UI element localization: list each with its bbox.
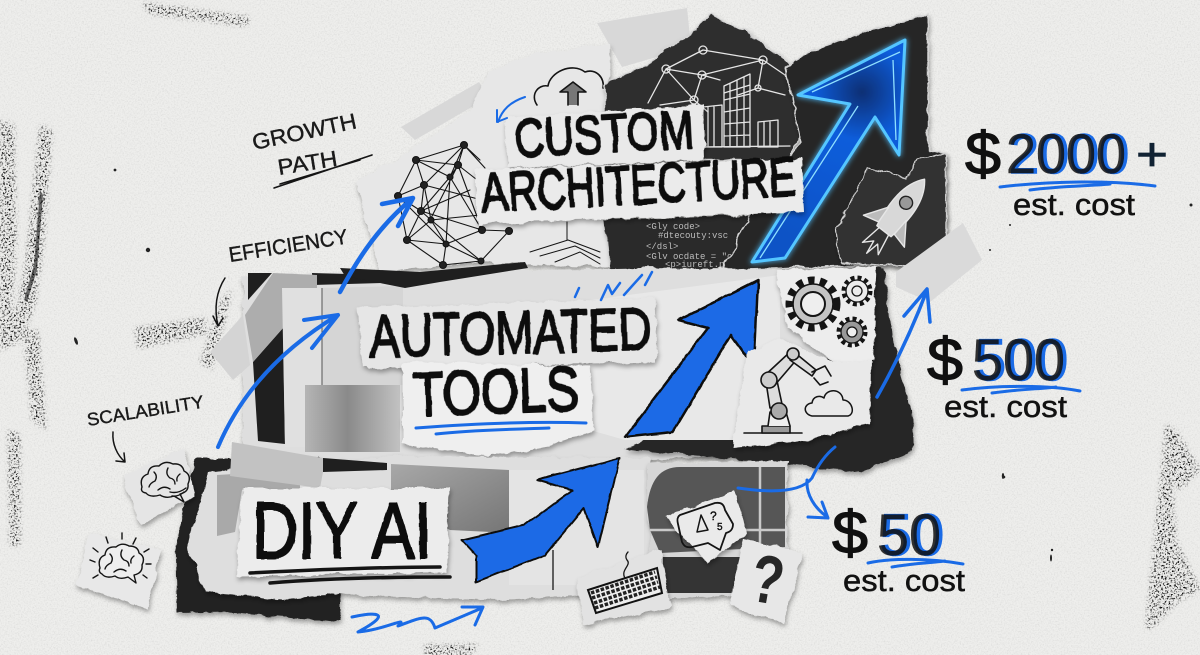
code snippet xyxy=(646,222,732,270)
heading: custom: CUSTOM xyxy=(512,100,695,169)
price: 500: $ xyxy=(927,326,963,393)
price: 50: est. cost xyxy=(843,563,965,598)
panel: dark backing right xyxy=(623,266,914,472)
underline: diy ai xyxy=(250,567,450,583)
panel: dark backing left xyxy=(253,328,285,444)
icon: speech bubble: 5 xyxy=(717,522,723,533)
panel: pale sheet xyxy=(322,286,403,385)
annotation: growth path xyxy=(250,108,372,188)
code snippet: <Glv ocdate = "o xyxy=(646,252,732,262)
panel: question note xyxy=(730,538,803,625)
code snippet: <Gly code> xyxy=(646,222,700,232)
annotation: efficiency: EFFICIENCY xyxy=(227,225,349,267)
arrow: blue marker arrow xyxy=(462,458,620,582)
price: 500: est. cost xyxy=(944,389,1067,424)
icon: speech bubble: ? xyxy=(710,509,717,523)
group: custom architecture tier xyxy=(356,8,946,272)
icon: gears xyxy=(789,278,870,346)
icon: rocket xyxy=(846,163,945,269)
annotation: efficiency xyxy=(213,225,349,326)
panel: gray photo scrap xyxy=(391,464,512,533)
arrow: scalability curve to automated xyxy=(218,315,338,447)
arrow: small blue arrow by custom xyxy=(497,97,525,122)
panel: light sheet behind arrow xyxy=(590,275,780,440)
heading: diy ai: DIY AI xyxy=(252,486,432,575)
heading: tools: TOOLS xyxy=(412,355,580,430)
arrow: automated to custom xyxy=(340,198,413,292)
panel: gray diagonal stripe xyxy=(245,273,317,362)
price: 2000+: est. cost xyxy=(1013,187,1135,222)
annotation: scalability: SCALABILITY xyxy=(85,392,205,430)
panel: network sketch paper xyxy=(356,44,612,272)
icon: speech bubble xyxy=(677,503,733,550)
panel: gray photo scrap xyxy=(305,385,400,452)
code snippet: <p>iureft.p xyxy=(665,260,724,270)
price: 500: 500 xyxy=(975,328,1068,393)
panel: dark block xyxy=(663,557,740,593)
underline: tools xyxy=(416,422,586,434)
specks xyxy=(73,169,1192,562)
icon: brain with rays xyxy=(90,533,151,583)
panel: speech bubble note xyxy=(665,490,747,563)
panel: brain note 1 xyxy=(122,448,196,524)
code snippet: </dsl> xyxy=(646,242,678,252)
panel: gray left scrap xyxy=(217,470,300,536)
price: 2000+ xyxy=(965,120,1168,222)
panel: dark building paper xyxy=(605,14,801,160)
panel: dark code paper xyxy=(605,215,750,272)
price: 2000+: 2000 xyxy=(1009,122,1129,185)
icon: robot arm xyxy=(744,348,831,433)
tape strip right xyxy=(896,223,982,302)
arrow: blue marker arrow xyxy=(625,280,758,437)
blue tick marks xyxy=(575,272,652,300)
price: 50: 50 xyxy=(880,503,944,568)
panel: brain note 2 xyxy=(77,533,160,610)
heading: architecture xyxy=(476,145,805,224)
panel: dark corner xyxy=(248,273,272,300)
tape strips xyxy=(401,8,691,140)
price: 2000+: $ xyxy=(965,120,1001,187)
panel: rocket paper xyxy=(836,153,946,268)
arrow: automated to custom cost xyxy=(877,289,930,397)
annotation: growth path: PATH xyxy=(276,146,339,180)
icon: brain xyxy=(141,462,189,502)
panel: gray tape xyxy=(230,442,323,488)
price: 500: 500 xyxy=(972,328,1065,393)
icon: keyboard xyxy=(588,552,662,613)
panel: gray tape left xyxy=(210,315,250,380)
group: automated tools tier xyxy=(210,198,914,472)
panel: dark band top xyxy=(312,273,383,285)
icon: building and network sketch xyxy=(648,46,790,147)
panel: dark torn tear xyxy=(340,262,528,288)
panel: gears paper xyxy=(776,266,877,366)
panel: question note: ? xyxy=(745,540,790,620)
price: 2000+: + xyxy=(1136,128,1168,180)
code snippet: #dtecouty:vsc xyxy=(658,231,728,241)
panel: dark backing xyxy=(176,458,340,622)
panel: dark arrow paper xyxy=(724,14,946,270)
panel: dark right scrap xyxy=(648,460,787,600)
price: 50 xyxy=(832,499,965,598)
heading: tools xyxy=(403,355,595,456)
price: 2000+: 2000 xyxy=(1006,122,1126,185)
icon: neural network sketch xyxy=(394,142,512,268)
price: 500 xyxy=(927,326,1080,424)
annotation: scalability xyxy=(85,392,205,462)
arrow: branch to 50 xyxy=(738,447,835,518)
panel: dark tear xyxy=(323,458,387,472)
panel: base torn paper xyxy=(188,456,652,600)
panel: keyboard note xyxy=(577,550,671,625)
annotation: growth path: GROWTH xyxy=(250,108,359,155)
heading: automated: AUTOMATED xyxy=(369,296,652,370)
group: diy ai tier xyxy=(77,442,835,632)
panel: charcoal photo xyxy=(647,467,785,553)
arrow: blue squiggle xyxy=(352,607,483,632)
price: 50: 50 xyxy=(877,503,941,568)
price: 50: $ xyxy=(832,499,868,566)
panel: light window scrap xyxy=(509,470,644,585)
sketch scrap below title xyxy=(530,222,600,264)
arrow: neon blue growth arrow xyxy=(752,40,905,262)
panel: robot paper xyxy=(733,338,871,448)
heading: architecture: ARCHITECTURE xyxy=(479,145,797,224)
icon: cloud xyxy=(805,391,852,416)
panel: base torn paper xyxy=(243,268,900,462)
icon: cloud upload xyxy=(534,68,611,105)
panel: white paper strip xyxy=(282,288,322,447)
